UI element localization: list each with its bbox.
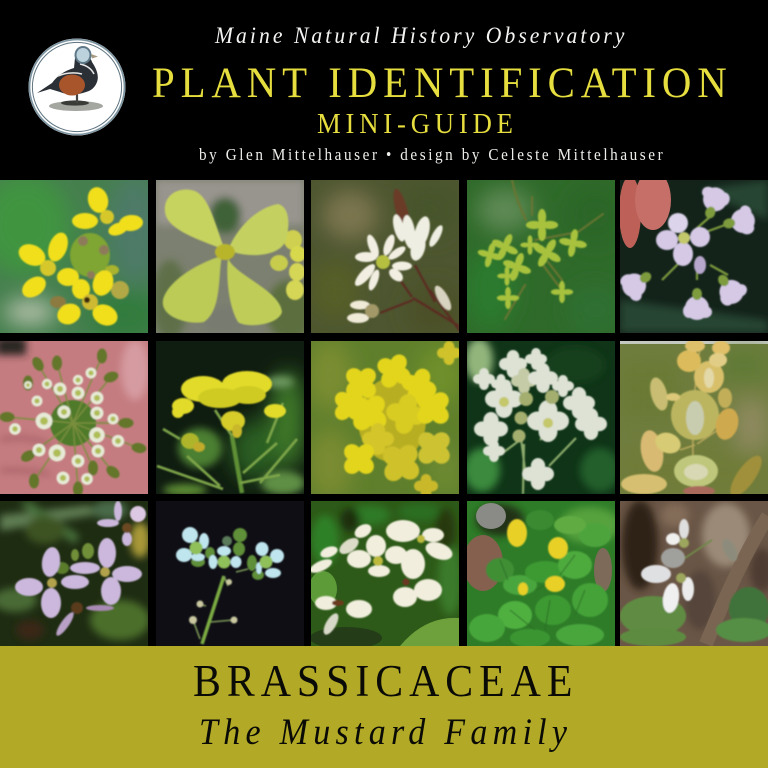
photo: pale yellow four-petal flower on gravel bbox=[156, 180, 304, 333]
photo: pink flowers on dark foliage bbox=[0, 500, 150, 646]
photo: pale blue flowers on black bbox=[156, 501, 304, 646]
photo: yellow mustard flowers on green bbox=[0, 180, 148, 333]
photo: pale translucent disc seed pods bbox=[620, 340, 768, 501]
footer band bbox=[0, 646, 768, 768]
photo: yellow flower cluster on dark stems bbox=[156, 341, 306, 496]
photo: white flower cluster on dark green bbox=[464, 338, 620, 494]
subtitle: mini-guide: MINI-GUIDE bbox=[317, 108, 513, 140]
footer heading: family name: BRASSICACEAE bbox=[193, 657, 572, 706]
photo: small white flowers with red stems bbox=[310, 180, 463, 335]
header subtitle: organisation: Maine Natural History Observatory bbox=[214, 22, 625, 48]
logo: harlequin duck medallion bbox=[28, 38, 126, 136]
photo: large yellow flower cluster bbox=[308, 340, 463, 500]
photo: lavender flowers and fingers bbox=[616, 170, 768, 333]
photo: white-green bud cluster on palm bbox=[0, 337, 149, 496]
main title: PLANT IDENTIFICATION bbox=[152, 60, 727, 107]
photo: yellow-green star flowers bbox=[465, 180, 623, 335]
credits line: by Glen Mittelhauser • design by Celeste Mittelhauser bbox=[199, 146, 663, 164]
photo grid bbox=[0, 170, 768, 649]
photo: large white flowers among green leaves bbox=[308, 501, 462, 649]
photo: small yellow flowers over bright green leaves bbox=[463, 501, 620, 647]
photo: white flower on tree bark bbox=[620, 500, 768, 646]
footer subheading: common name: The Mustard Family bbox=[199, 711, 567, 752]
